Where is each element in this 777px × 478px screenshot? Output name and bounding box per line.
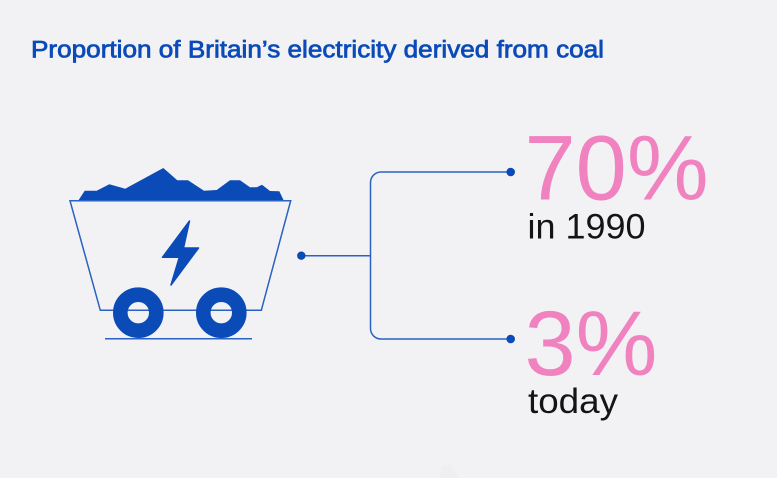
label: in 1990: in 1990: [528, 208, 646, 247]
dot: today: [506, 335, 515, 343]
dot: 1990: [506, 168, 515, 176]
label: today: today: [528, 382, 619, 421]
coal heap: [78, 168, 284, 201]
left wheel: [120, 295, 156, 331]
cart body: [70, 201, 291, 310]
icon: lightning bolt: [162, 221, 198, 285]
stat: 3%: 3%: [524, 293, 657, 395]
source dot: [297, 252, 305, 260]
connector bracket: [297, 168, 515, 343]
right wheel: [203, 295, 239, 331]
stat: 70%: 70%: [524, 118, 709, 220]
title: Proportion of Britain’s electricity derived from coal: [31, 36, 604, 64]
rail: [105, 338, 252, 340]
icon: coal cart: [70, 168, 291, 339]
